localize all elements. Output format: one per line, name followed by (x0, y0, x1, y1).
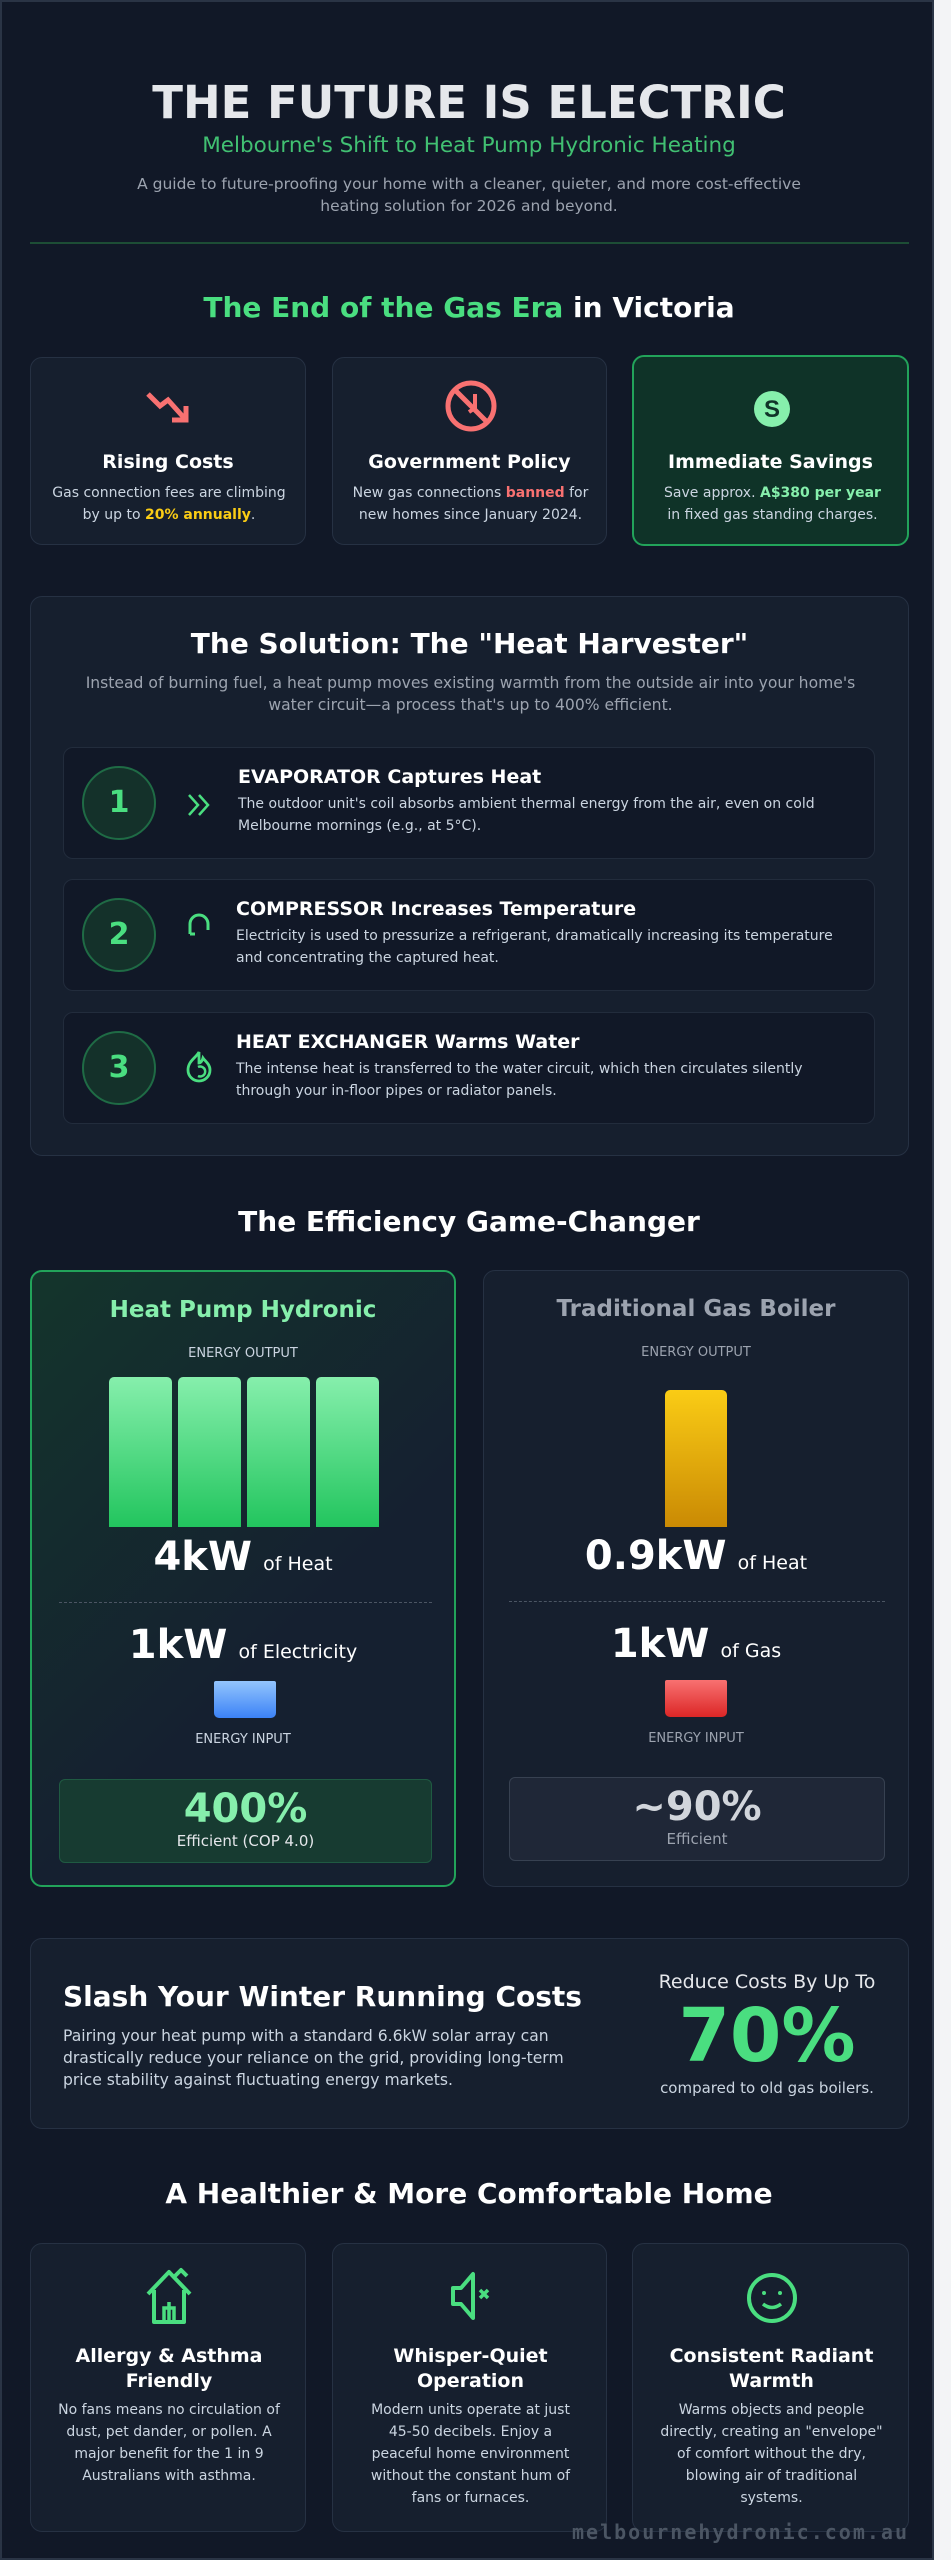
panel: gas boiler: 1kW of Gas (611, 1621, 781, 1667)
heading: efficiency: The Efficiency Game-Changer (238, 1205, 700, 1238)
stat: 70%: 70% (678, 1993, 856, 2079)
panel: heat pump hydronic: Heat Pump Hydronic (110, 1297, 376, 1323)
card: rising costs (30, 357, 306, 545)
card: warmth (632, 2243, 909, 2532)
card: immediate savings: Immediate Savings (668, 451, 873, 473)
card: government policy: Government Policy (368, 451, 571, 473)
card: quiet: Whisper-Quiet Operation (393, 2345, 548, 2392)
icon: dollar coin (754, 391, 790, 427)
footer url: melbournehydronic.com.au (572, 2520, 909, 2544)
card: rising costs: Rising Costs (102, 451, 234, 473)
title: THE FUTURE IS ELECTRIC (152, 76, 786, 129)
step 3 (63, 1012, 875, 1124)
card: allergy: No fans means no circulation of dust, pet dander, or pollen. A major benefit for the 1 in 9 Australians with asthma. (58, 2402, 280, 2484)
panel: heat pump hydronic: ENERGY INPUT (195, 1732, 291, 1747)
heading: solution: The Solution: The "Heat Harvester" (191, 627, 748, 660)
panel: heat pump hydronic (30, 1270, 456, 1887)
panel: running costs: Pairing your heat pump with a standard 6.6kW solar array can drastically reduce your reliance on the grid, providing long-term price stability against fluctuating energy markets. (63, 2027, 564, 2089)
icon: flame (186, 1051, 212, 1082)
card: quiet (332, 2243, 607, 2532)
step 1: The outdoor unit's coil absorbs ambient thermal energy from the air, even on cold Melbourne mornings (e.g., at 5°C). (238, 796, 815, 834)
step 2: 2 (109, 917, 129, 952)
panel: heat pump hydronic: 4kW of Heat (153, 1534, 333, 1580)
step 2 (63, 879, 875, 991)
panel: gas boiler: ENERGY INPUT (648, 1731, 744, 1746)
intro text: A guide to future-proofing your home with a cleaner, quieter, and more cost-effective heating solution for 2026 and beyond. (137, 175, 801, 215)
panel: running costs (30, 1938, 909, 2129)
panel: heat pump hydronic: ENERGY OUTPUT (188, 1346, 298, 1361)
icon: ban (446, 380, 496, 432)
step 1 (63, 747, 875, 859)
panel: heat pump hydronic: 1kW of Electricity (129, 1622, 357, 1668)
step 1: 1 (109, 785, 129, 820)
card: warmth: Warms objects and people directly, creating an "envelope" of comfort without the dry, blowing air of traditional systems. (660, 2402, 883, 2506)
panel: gas boiler (483, 1270, 909, 1887)
stat: 400%: Efficient (COP 4.0) (177, 1832, 314, 1850)
panel: solution (30, 596, 909, 1156)
stat: 90% (509, 1777, 885, 1861)
heading: end of gas era: The End of the Gas Era in Victoria (203, 291, 735, 324)
icon: house (146, 2268, 192, 2324)
card: government policy: New gas connections banned for new homes since January 2024. (353, 485, 588, 523)
step 2: COMPRESSOR Increases Temperature (236, 898, 636, 920)
card: quiet: Modern units operate at just 45-50 decibels. Enjoy a peaceful home environment without the constant hum of fans or furnaces. (371, 2402, 570, 2506)
icon: dollar coin: S (764, 396, 780, 423)
card: warmth: Consistent Radiant Warmth (670, 2345, 873, 2392)
panel: gas boiler: Traditional Gas Boiler (556, 1296, 835, 1322)
card: rising costs: Gas connection fees are climbing by up to 20% annually. (52, 485, 286, 523)
stat: 90%: Efficient (666, 1830, 728, 1848)
step 3: 3 (109, 1050, 129, 1085)
bar: electricity input (214, 1681, 276, 1718)
step 3: The intense heat is transferred to the water circuit, which then circulates silently through your in-floor pipes or radiator panels. (236, 1061, 802, 1099)
card: immediate savings (632, 355, 909, 546)
panel: running costs: Slash Your Winter Running Costs (63, 1980, 582, 2013)
panel: gas boiler: ENERGY OUTPUT (641, 1345, 751, 1360)
card: government policy (332, 357, 607, 545)
card: immediate savings: Save approx. A$380 per year in fixed gas standing charges. (664, 485, 881, 523)
stat: 400% (59, 1779, 432, 1863)
subtitle: Melbourne's Shift to Heat Pump Hydronic Heating (202, 133, 736, 158)
bar: gas output (665, 1390, 727, 1527)
card: allergy (30, 2243, 306, 2532)
icon: chevrons (188, 794, 210, 816)
stat: 70% (659, 1971, 875, 2097)
panel: gas boiler: 0.9kW of Heat (585, 1533, 807, 1579)
card: allergy: Allergy & Asthma Friendly (75, 2345, 262, 2392)
step 3: HEAT EXCHANGER Warms Water (236, 1031, 580, 1053)
icon: smile (747, 2273, 797, 2323)
icon: trend down (146, 392, 188, 422)
solution intro: Instead of burning fuel, a heat pump moves existing warmth from the outside air into your home's water circuit—a process that's up to 400% efficient. (86, 674, 855, 714)
stat: 90%: ~90% (632, 1784, 762, 1830)
heading: healthier home: A Healthier & More Comfortable Home (165, 2177, 773, 2210)
stat: 70%: compared to old gas boilers. (660, 2079, 874, 2097)
chart: output bars (109, 1377, 379, 1527)
step 1: EVAPORATOR Captures Heat (238, 766, 541, 788)
icon: rotate (188, 914, 210, 936)
stat: 400%: 400% (184, 1786, 307, 1832)
stat: 70%: Reduce Costs By Up To (659, 1971, 875, 1993)
step 2: Electricity is used to pressurize a refrigerant, dramatically increasing its temperature and concentrating the captured heat. (236, 928, 833, 966)
bar: gas input (665, 1680, 727, 1717)
icon: speaker mute (451, 2272, 490, 2320)
